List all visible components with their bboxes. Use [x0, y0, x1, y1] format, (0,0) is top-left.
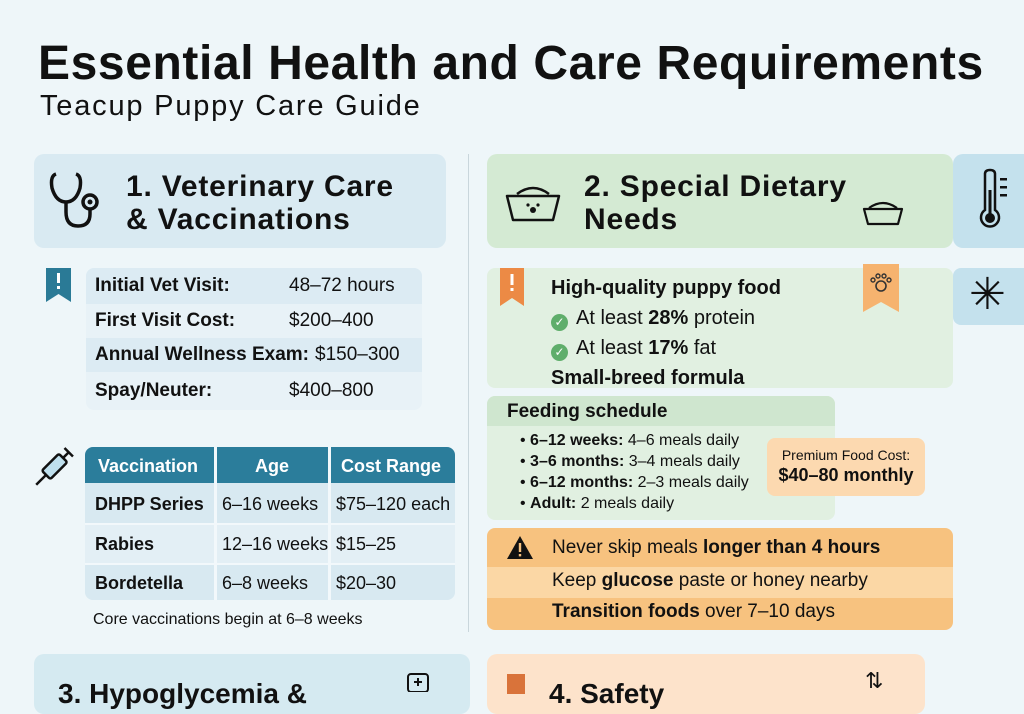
- heading: veterinary: [126, 170, 394, 236]
- table: vaccinations: $75–120 each: [336, 494, 450, 514]
- table: vaccinations: 6–16 weeks: [222, 494, 318, 514]
- panel: vet info table: $150–300: [315, 344, 400, 365]
- icon: small bowl: [862, 202, 904, 226]
- callout: premium food cost: Premium Food Cost:: [782, 447, 910, 463]
- icon: syringe: [35, 447, 74, 486]
- table: vaccinations: Vaccination: [98, 456, 198, 476]
- panel: vet info table: Spay/Neuter:: [95, 380, 212, 401]
- panel: vet info table: Annual Wellness Exam:: [95, 344, 309, 365]
- heading: dietary: [584, 170, 847, 236]
- panel: vet info table: First Visit Cost:: [95, 310, 235, 331]
- heading: dietary: 2. Special Dietary: [584, 170, 847, 203]
- heading: feeding schedule: Feeding schedule: [507, 401, 667, 422]
- panel: warnings: Never skip meals longer than 4 hours: [552, 537, 880, 558]
- icon: bookmark alert blue: [46, 268, 71, 302]
- table: vaccinations: Age: [255, 456, 289, 476]
- text: food requirements: ✓: [554, 345, 565, 359]
- icon: dog bowl: [506, 186, 560, 222]
- heading: veterinary: 1. Veterinary Care: [126, 170, 394, 203]
- panel: vet info table: $200–400: [289, 310, 374, 331]
- list: schedule: • 3–6 months: 3–4 meals daily: [520, 453, 740, 470]
- callout: premium food cost: $40–80 monthly: [778, 465, 914, 485]
- panel: bottom right (partial): 4. Safety: [549, 678, 664, 709]
- table: vaccinations: $20–30: [336, 573, 396, 593]
- subtitle: Teacup Puppy Care Guide: [40, 90, 422, 122]
- panel: vet info table: Initial Vet Visit:: [95, 275, 230, 296]
- table: vaccinations: 12–16 weeks: [222, 534, 328, 554]
- panel: feeding schedule: [487, 396, 835, 520]
- text: food requirements: High-quality puppy food: [551, 277, 781, 299]
- text: food requirements: At least 28% protein: [576, 307, 755, 329]
- table: vaccinations: 6–8 weeks: [222, 573, 308, 593]
- icon: warning triangle: [507, 536, 533, 559]
- table: vaccinations: Cost Range: [341, 456, 441, 476]
- text: food requirements: Small-breed formula: [551, 367, 744, 389]
- panel: vet info table: $400–800: [289, 380, 374, 401]
- list: schedule: • 6–12 months: 2–3 meals daily: [520, 474, 749, 491]
- panel: temperature (partial): [953, 154, 1024, 248]
- icon: thermometer: [980, 168, 1007, 228]
- panel: warnings: Transition foods over 7–10 days: [552, 601, 835, 622]
- panel: vet info table: [86, 268, 422, 410]
- table: vaccinations: Bordetella: [95, 573, 183, 593]
- panel: bottom left (partial): 3. Hypoglycemia &: [58, 678, 307, 709]
- panel: high-quality food: [487, 268, 953, 388]
- callout: premium food cost: [767, 438, 925, 496]
- table: vaccinations: DHPP Series: [95, 494, 204, 514]
- icon: arrows: ⇅: [865, 668, 883, 693]
- table: vaccinations: [85, 447, 455, 600]
- list: schedule: • Adult: 2 meals daily: [520, 495, 674, 512]
- heading: dietary: Needs: [584, 203, 678, 236]
- list: schedule: [520, 432, 749, 512]
- panel: cold (partial): [953, 268, 1024, 325]
- icon: snowflake: ✳: [969, 270, 1006, 319]
- table: vaccinations: $15–25: [336, 534, 396, 554]
- panel: bottom right (partial): [487, 654, 925, 714]
- panel: veterinary header: [34, 154, 446, 248]
- text: food requirements: ✓: [554, 315, 565, 329]
- note: core vaccinations: Core vaccinations begin at 6–8 weeks: [93, 611, 362, 628]
- text: food requirements: At least 17% fat: [576, 337, 716, 359]
- panel: dietary header: [487, 154, 953, 248]
- title: Essential Health and Care Requirements: [38, 37, 984, 90]
- panel: warnings: [487, 528, 953, 630]
- icon: paw bookmark: [863, 264, 899, 312]
- panel: warnings: Keep glucose paste or honey nearby: [552, 570, 868, 591]
- icon: orange bookmark: [500, 268, 524, 306]
- heading: veterinary: & Vaccinations: [126, 203, 351, 236]
- panel: vet info table: 48–72 hours: [289, 275, 395, 296]
- table: vaccinations: Rabies: [95, 534, 154, 554]
- icon: stethoscope: [50, 172, 99, 228]
- list: schedule: • 6–12 weeks: 4–6 meals daily: [520, 432, 739, 449]
- icon: first aid: [407, 673, 429, 692]
- panel: bottom left (partial): [34, 654, 470, 714]
- text: food requirements: [551, 277, 781, 389]
- divider line: [468, 154, 469, 632]
